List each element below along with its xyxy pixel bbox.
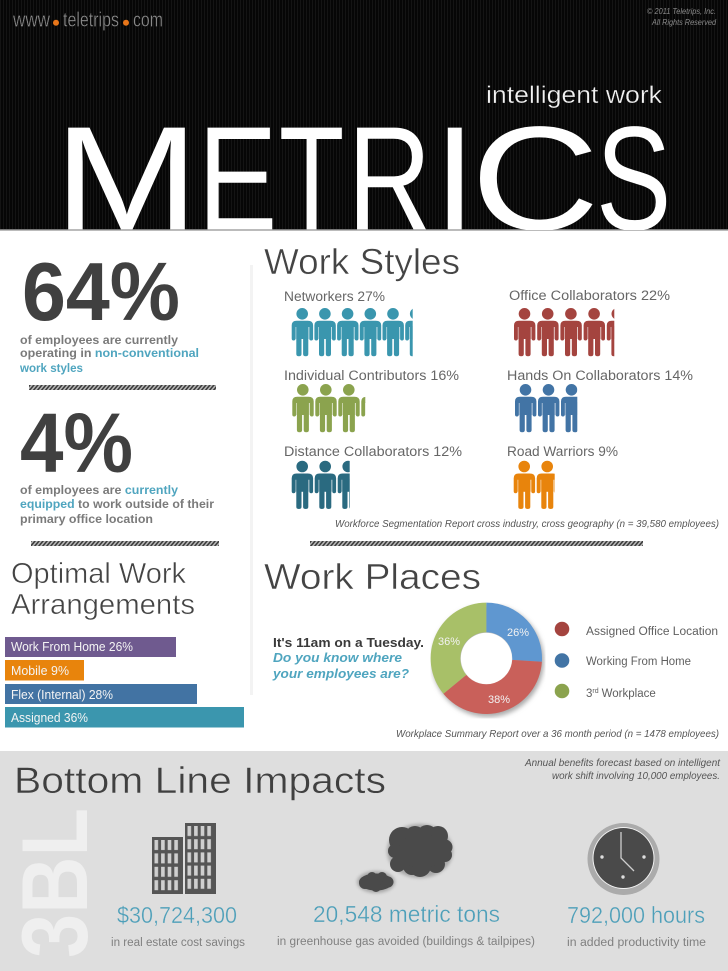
bar: flex internal bbox=[5, 684, 197, 704]
text: 4% description bbox=[20, 483, 214, 526]
bar: mobile: Mobile 9% bbox=[11, 664, 69, 678]
caption: forecast basis bbox=[524, 757, 721, 782]
title: METRICS: I bbox=[434, 95, 475, 261]
donut chart: 38% bbox=[488, 694, 510, 706]
icon: office buildings bbox=[152, 823, 216, 894]
legend: rd bbox=[592, 688, 599, 695]
text: question bbox=[272, 635, 424, 681]
networkers 27%: Networkers 27% bbox=[284, 289, 385, 304]
metric: real estate savings: in real estate cost savings bbox=[111, 937, 245, 949]
panel: optimal work arrangements bbox=[5, 558, 244, 728]
metric: greenhouse gas bbox=[277, 901, 535, 948]
logo: teletrips web address bbox=[12, 10, 163, 32]
networkers 27% bbox=[285, 291, 413, 356]
heading: Optimal Work Arrangements: Optimal Work bbox=[11, 558, 186, 590]
legend: Working From Home bbox=[586, 656, 691, 668]
logo: teletrips web address: com bbox=[133, 10, 163, 32]
icon: emission clouds bbox=[357, 824, 453, 893]
text: 64% description: of employees are currently bbox=[20, 333, 178, 347]
title: METRICS: T bbox=[279, 97, 344, 262]
hands on collaborators 14% bbox=[507, 368, 693, 432]
road warriors 9%: Road Warriors 9% bbox=[507, 444, 618, 459]
donut chart bbox=[431, 603, 542, 714]
text: question: Do you know where bbox=[273, 650, 402, 665]
title: METRICS: M bbox=[54, 97, 199, 262]
title: METRICS: C bbox=[471, 96, 599, 261]
heading: Work Styles: Work Styles bbox=[264, 241, 460, 282]
title: METRICS bbox=[68, 126, 666, 230]
office collaborators 22%: Office Collaborators 22% bbox=[509, 288, 670, 303]
heading: Bottom Line Impacts: Bottom Line Impacts bbox=[14, 760, 386, 801]
individual contributors 16%: Individual Contributors 16% bbox=[284, 368, 459, 383]
hands on collaborators 14%: Hands On Collaborators 14% bbox=[507, 368, 693, 383]
stat: 4%: 4% bbox=[20, 396, 133, 490]
bar: assigned: Assigned 36% bbox=[11, 711, 88, 725]
legend: Workplace bbox=[602, 688, 656, 700]
panel: key stats bbox=[19, 245, 219, 546]
legend bbox=[555, 622, 718, 700]
copyright notice bbox=[647, 7, 717, 27]
title: METRICS: S bbox=[596, 96, 671, 261]
caption: forecast basis: Annual benefits forecast based on intelligent bbox=[524, 757, 721, 769]
metric: productivity hours bbox=[567, 902, 706, 949]
title: METRICS: R bbox=[348, 97, 431, 262]
text: question: It's 11am on a Tuesday. bbox=[273, 635, 424, 650]
logo: teletrips web address: www bbox=[12, 10, 50, 32]
legend: 3 bbox=[586, 688, 592, 700]
text: 4% description: of employees are currently bbox=[20, 483, 178, 497]
distance collaborators 12% bbox=[284, 444, 462, 509]
bar: work from home: Work From Home 26% bbox=[11, 640, 133, 654]
heading: Optimal Work Arrangements bbox=[11, 558, 195, 621]
legend: Assigned Office Location bbox=[586, 626, 718, 638]
bar: work from home bbox=[5, 637, 176, 657]
text: 64% description: work styles bbox=[19, 361, 83, 375]
bar: flex internal: Flex (Internal) 28% bbox=[11, 688, 113, 702]
icon: clock bbox=[588, 823, 660, 895]
metric: productivity hours: in added productivity time bbox=[567, 937, 706, 949]
copyright notice: © 2011 Teletrips, Inc. bbox=[647, 7, 716, 16]
office collaborators 22% bbox=[509, 288, 670, 356]
panel: bottom line impacts bbox=[0, 751, 728, 971]
road warriors 9% bbox=[507, 444, 618, 509]
metric: productivity hours: 792,000 hours bbox=[567, 902, 705, 928]
metric: greenhouse gas: in greenhouse gas avoided (buildings & tailpipes) bbox=[277, 936, 535, 948]
text: 4% description: equipped to work outside of their bbox=[20, 497, 214, 511]
bar: mobile bbox=[5, 660, 84, 680]
bar: assigned bbox=[5, 707, 244, 728]
text: 64% description bbox=[19, 333, 199, 375]
individual contributors 16% bbox=[284, 368, 459, 432]
text: question: your employees are? bbox=[272, 666, 409, 681]
copyright notice: All Rights Reserved bbox=[651, 18, 717, 27]
metric: real estate savings: $30,724,300 bbox=[117, 902, 237, 928]
panel: work styles bbox=[264, 241, 719, 546]
metric: real estate savings bbox=[111, 902, 245, 949]
vertical label: 3BL: 3BL bbox=[2, 808, 107, 958]
caption: forecast basis: work shift involving 10,000 employees. bbox=[552, 770, 720, 782]
subtitle: intelligent work bbox=[486, 82, 663, 109]
metric: greenhouse gas: 20,548 metric tons bbox=[313, 901, 500, 927]
donut chart: 26% bbox=[507, 627, 529, 639]
title: METRICS: E bbox=[198, 95, 277, 261]
text: 64% description: operating in non-conventional bbox=[20, 346, 199, 360]
heading: Work Places: Work Places bbox=[264, 556, 481, 597]
panel: work places bbox=[264, 556, 719, 740]
text: 4% description: primary office location bbox=[20, 512, 153, 526]
stat: 64%: 64% bbox=[22, 245, 180, 338]
donut chart: 36% bbox=[438, 636, 460, 648]
heading: Optimal Work Arrangements: Arrangements bbox=[11, 589, 195, 621]
logo: teletrips web address: teletrips bbox=[63, 10, 119, 32]
panel: header bbox=[0, 0, 728, 230]
distance collaborators 12%: Distance Collaborators 12% bbox=[284, 444, 462, 459]
